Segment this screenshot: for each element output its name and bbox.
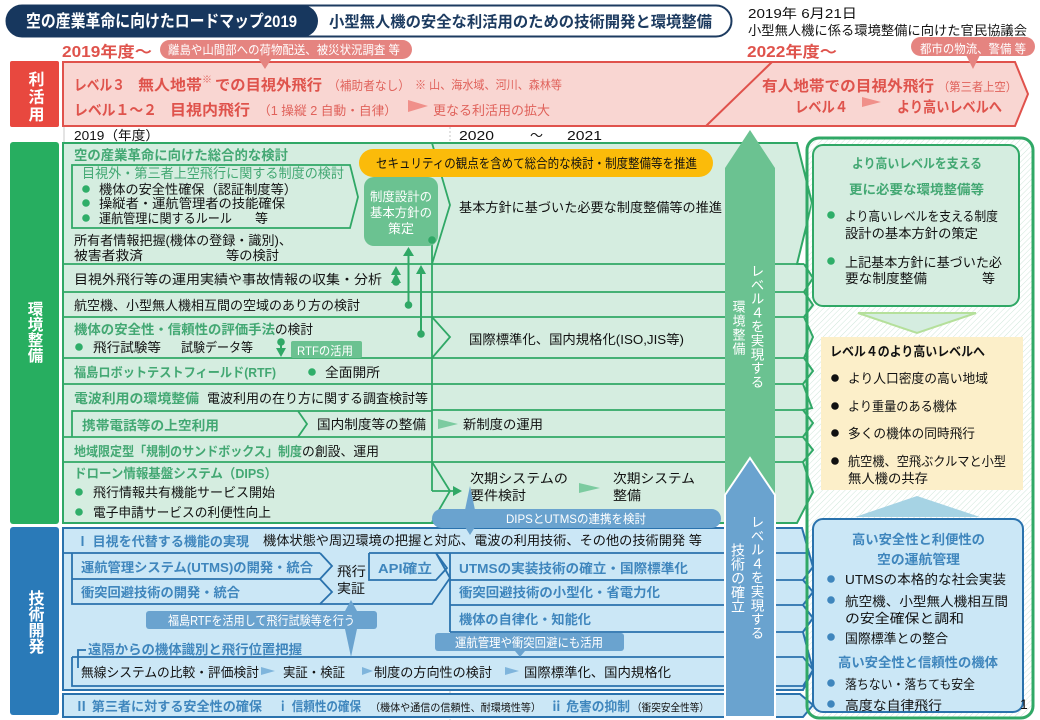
chevron: beyond-visual rules: 等 xyxy=(255,211,268,226)
row: airframe evaluation: の検討 xyxy=(275,322,313,337)
label: RTF use xyxy=(291,341,362,358)
text: policy implementation: 基本方針に基づいた必要な制度整備等の推進 xyxy=(459,200,722,215)
issuer and date: 小型無人機に係る環境整備に向けた官民協議会 xyxy=(748,23,1027,38)
level 3 row: レベル３ xyxy=(74,77,125,94)
row: airframe evaluation: 機体の安全性・信頼性の評価手法 xyxy=(74,322,275,337)
panel: high safety: 落ちない・落ちても安全 xyxy=(845,677,975,692)
panel: higher level goals: より人口密度の高い地域 xyxy=(848,371,988,386)
panel: high safety: 高い安全性と利便性の xyxy=(852,532,985,547)
row: Fukushima RTF: 福島ロボットテストフィールド(RTF) xyxy=(74,365,276,380)
level 1-2 row: 目視内飛行 xyxy=(170,102,250,119)
next system flow: 次期システムの xyxy=(470,471,568,486)
year axis xyxy=(64,127,602,143)
row: DIPS: 電子申請サービスの利便性向上 xyxy=(93,505,271,520)
label: usage xyxy=(10,61,59,127)
remote ID flow xyxy=(81,665,671,680)
chevron: beyond-visual rules: 機体の安全性確保（認証制度等） xyxy=(99,182,297,197)
callout: island delivery: 離島や山間部への荷物配送、被災状況調査 等 xyxy=(168,42,400,57)
level 4 text: 有人地帯での目視外飛行 xyxy=(762,77,934,95)
title banner: 小型無人機の安全な利活用のための技術開発と環境整備 xyxy=(329,12,712,31)
panel: further environment: より高いレベルを支える制度 xyxy=(845,209,998,224)
text: flight demonstration xyxy=(337,564,366,596)
arrow: environment level 4: レベル４を実現する xyxy=(748,264,764,389)
row: third party safety: （衝突安全性等） xyxy=(632,701,709,714)
callout: urban logistics xyxy=(911,37,1035,69)
box: basic policy: 制度設計の xyxy=(370,189,432,204)
level 3 row: ※ xyxy=(202,75,212,86)
heading: remote ID: 遠隔からの機体識別と飛行位置把握 xyxy=(88,642,302,657)
issuer and date xyxy=(748,6,1027,38)
row: airframe evaluation: 飛行試験等 xyxy=(93,340,161,355)
title banner xyxy=(6,5,732,37)
panel: high safety: 空の運航管理 xyxy=(877,552,960,567)
arrow: environment level 4: 環境整備 xyxy=(730,300,746,356)
panel: higher level goals: 航空機、空飛ぶクルマと小型 xyxy=(848,454,1006,469)
row: radio xyxy=(74,391,428,406)
text: collision miniaturize: 衝突回避技術の小型化・省電力化 xyxy=(459,585,660,600)
text: owner info: 被害者救済 xyxy=(74,248,143,263)
remote ID flow: 無線システムの比較・評価検討 xyxy=(81,665,259,680)
panel: higher level goals xyxy=(821,337,1023,490)
arrow: technology level 4 xyxy=(725,458,775,717)
panel: environment xyxy=(10,142,813,524)
text: collision dev: 衝突回避技術の開発・統合 xyxy=(81,585,240,600)
callout: island delivery xyxy=(160,40,412,69)
callout: Fukushima RTF xyxy=(146,600,377,657)
right container outline xyxy=(807,138,1033,718)
row: mobile phone xyxy=(82,417,543,433)
issuer and date: 2019年 6月21日 xyxy=(748,6,857,21)
title banner: 空の産業革命に向けたロードマップ2019 xyxy=(26,12,297,31)
arrowhead into next-system xyxy=(453,486,462,496)
level 4 text xyxy=(762,77,1017,116)
panel: high safety: の安全確保と調和 xyxy=(845,611,964,626)
level 1-2 row: 更なる利活用の拡大 xyxy=(433,103,550,118)
text: flight demonstration: 飛行 xyxy=(337,564,366,579)
text: operations data: 目視外飛行等の運用実績や事故情報の収集・分析 xyxy=(74,272,382,287)
year axis: 2020 xyxy=(459,128,494,143)
level 1-2 row: レベル１～２ xyxy=(74,102,157,119)
row: mobile phone: 国内制度等の整備 xyxy=(317,417,426,432)
panel: high safety xyxy=(813,519,1023,713)
callout: urban logistics: 都市の物流、警備 等 xyxy=(920,41,1026,56)
level 3 row: （補助者なし） xyxy=(328,79,410,93)
level 4 text: レベル４ xyxy=(795,99,848,116)
chevron: beyond-visual rules xyxy=(72,165,358,228)
row: DIPS: ドローン情報基盤システム（DIPS） xyxy=(74,466,277,481)
label: usage: 利活用 xyxy=(26,71,44,124)
arrow: test data xyxy=(276,338,286,357)
panel: high safety: 高度な自律飛行 xyxy=(845,698,942,713)
arrow: down triangle xyxy=(858,313,976,333)
box: basic policy: 策定 xyxy=(388,221,414,236)
technology panel shape xyxy=(63,528,813,690)
year axis: ～ xyxy=(530,128,543,143)
row: third party safety: Ⅱ 第三者に対する安全性の確保 xyxy=(75,699,262,714)
panel: higher level goals: 無人機の共存 xyxy=(848,471,928,486)
feedback arrows xyxy=(391,247,426,338)
chevron: beyond-visual rules: 目視外・第三者上空飛行に関する制度の検討 xyxy=(82,165,344,181)
text: autonomy: 機体の自律化・知能化 xyxy=(459,612,591,627)
row: function replacement: Ⅰ 目視を代替する機能の実現 xyxy=(76,534,249,549)
next system flow: 次期システム xyxy=(613,471,695,486)
row: radio: 電波利用の環境整備 xyxy=(74,391,199,406)
text: owner info: 所有者情報把握(機体の登録・識別)、 xyxy=(74,233,292,248)
row dividers xyxy=(63,553,813,686)
remote ID flow: 国際標準化、国内規格化 xyxy=(524,665,671,680)
remote ID flow: 実証・検証 xyxy=(283,665,345,680)
row: function replacement: 機体状態や周辺環境の把握と対応、電波の利用技術、その他の技術開発 等 xyxy=(263,533,702,548)
panel: high safety: 航空機、小型無人機相互間 xyxy=(845,594,1008,609)
box: basic policy xyxy=(364,177,438,246)
row: DIPS xyxy=(74,466,277,520)
row: third party safety: （機体や通信の信頼性、耐環境性等） xyxy=(370,701,541,714)
text: standards: 国際標準化、国内規格化(ISO,JIS等) xyxy=(469,332,684,347)
panel: high safety: 高い安全性と信頼性の機体 xyxy=(838,655,998,670)
callout: traffic mgmt xyxy=(435,633,624,657)
panel: technology xyxy=(10,486,813,717)
callout: Fukushima RTF: 福島RTFを活用して飛行試験等を行う xyxy=(168,613,355,628)
panel: further environment: 等 xyxy=(982,271,995,286)
text: flight demonstration: 実証 xyxy=(337,581,365,596)
environment panel shape xyxy=(63,143,813,523)
arrow: environment level 4 xyxy=(725,130,775,494)
arrow: technology level 4: レベル４を実現する xyxy=(748,515,764,640)
next system flow: 要件検討 xyxy=(470,488,526,503)
panel: further environment xyxy=(813,145,1019,306)
next system flow: 整備 xyxy=(613,488,641,503)
security pill: セキュリティの観点を含めて総合的な検討・制度整備等を推進 xyxy=(376,156,697,171)
row: third party safety: ⅰ 信頼性の確保 xyxy=(277,699,361,714)
panel: further environment: 要な制度整備 xyxy=(845,271,927,286)
panel: further environment: より高いレベルを支える xyxy=(852,156,982,171)
panel: higher level goals: より重量のある機体 xyxy=(848,399,957,414)
panel: higher level goals: レベル４のより高いレベルへ xyxy=(830,344,985,359)
text: owner info: 等の検討 xyxy=(226,248,279,263)
next system flow xyxy=(470,471,695,503)
arrow: technology level 4: 技術の確立 xyxy=(730,543,746,613)
row: airframe evaluation: 試験データ等 xyxy=(181,340,253,355)
text: API: API確立 xyxy=(378,561,432,576)
remote ID flow: 制度の方向性の検討 xyxy=(374,665,492,680)
label: RTF use: RTFの活用 xyxy=(297,344,353,358)
level 3 row: での目視外飛行 xyxy=(215,76,322,94)
row: sandbox: 地域限定型「規制のサンドボックス」制度 xyxy=(74,444,302,459)
panel: high safety: UTMSの本格的な社会実装 xyxy=(845,572,1006,587)
callout: traffic mgmt: 運航管理や衝突回避にも活用 xyxy=(455,635,603,650)
box: basic policy: 基本方針の xyxy=(370,205,432,220)
security pill xyxy=(359,149,713,177)
heading: overall review: 空の産業革命に向けた総合的な検討 xyxy=(74,147,288,163)
page number: 1 xyxy=(1020,696,1028,712)
row: mobile phone: 携帯電話等の上空利用 xyxy=(82,418,219,433)
heading: 2019 start: 2019年度～ xyxy=(62,42,152,61)
level 4 text: （第三者上空） xyxy=(938,80,1017,94)
row: third party safety: ⅱ 危害の抑制 xyxy=(550,699,630,714)
heading: 2022 start: 2022年度～ xyxy=(747,42,837,61)
text: owner info xyxy=(74,233,292,263)
label: environment xyxy=(10,142,59,524)
dotted year divider xyxy=(449,127,451,720)
row dividers xyxy=(63,143,804,522)
row: Fukushima RTF: 全面開所 xyxy=(325,365,380,380)
row: third party safety xyxy=(63,694,813,717)
label: environment: 環境整備 xyxy=(26,301,43,364)
label: technology xyxy=(10,527,59,715)
label: technology: 技術開発 xyxy=(26,589,44,654)
panel: further environment: 更に必要な環境整備等 xyxy=(849,182,984,197)
row: function replacement xyxy=(76,533,702,549)
row: mobile phone: 新制度の運用 xyxy=(463,417,543,432)
row: DIPS: 飛行情報共有機能サービス開始 xyxy=(93,485,275,500)
year axis: 2021 xyxy=(567,128,602,143)
panel: higher level goals: 多くの機体の同時飛行 xyxy=(848,426,975,441)
text: UTMS dev: 運航管理システム(UTMS)の開発・統合 xyxy=(81,560,313,575)
callout: DIPS UTMS link: DIPSとUTMSの連携を検討 xyxy=(506,511,646,526)
text: airspace: 航空機、小型無人機相互間の空域のあり方の検討 xyxy=(74,298,360,313)
level 3 row: ※ 山、海水域、河川、森林等 xyxy=(415,77,562,92)
row: sandbox: の創設、運用 xyxy=(302,444,379,459)
hatched right container background xyxy=(807,138,1033,718)
level 4 text: より高いレベルへ xyxy=(897,99,1002,116)
text: UTMS standard: UTMSの実装技術の確立・国際標準化 xyxy=(459,561,688,576)
year axis: 2019（年度） xyxy=(74,128,159,143)
chevron: beyond-visual rules: 操縦者・運航管理者の技能確保 xyxy=(99,196,285,211)
arrow: up triangle xyxy=(855,496,980,517)
row: radio: 電波利用の在り方に関する調査検討等 xyxy=(207,391,428,406)
level 3 row xyxy=(74,75,562,94)
panel: further environment: 設計の基本方針の策定 xyxy=(845,226,978,241)
row: airframe evaluation xyxy=(74,322,313,355)
panel: further environment: 上記基本方針に基づいた必 xyxy=(845,255,1002,270)
chevron: beyond-visual rules: 運航管理に関するルール xyxy=(99,211,232,226)
panel: high safety: 国際標準との整合 xyxy=(845,631,948,646)
white wedge xyxy=(800,203,813,264)
level 1-2 row: （1 操縦 2 自動・自律） xyxy=(258,103,397,118)
level 3 row: 無人地帯 xyxy=(138,77,202,94)
panel: usage band xyxy=(10,37,1035,127)
callout: DIPS UTMS link xyxy=(432,486,721,535)
level 1-2 row xyxy=(74,100,550,119)
